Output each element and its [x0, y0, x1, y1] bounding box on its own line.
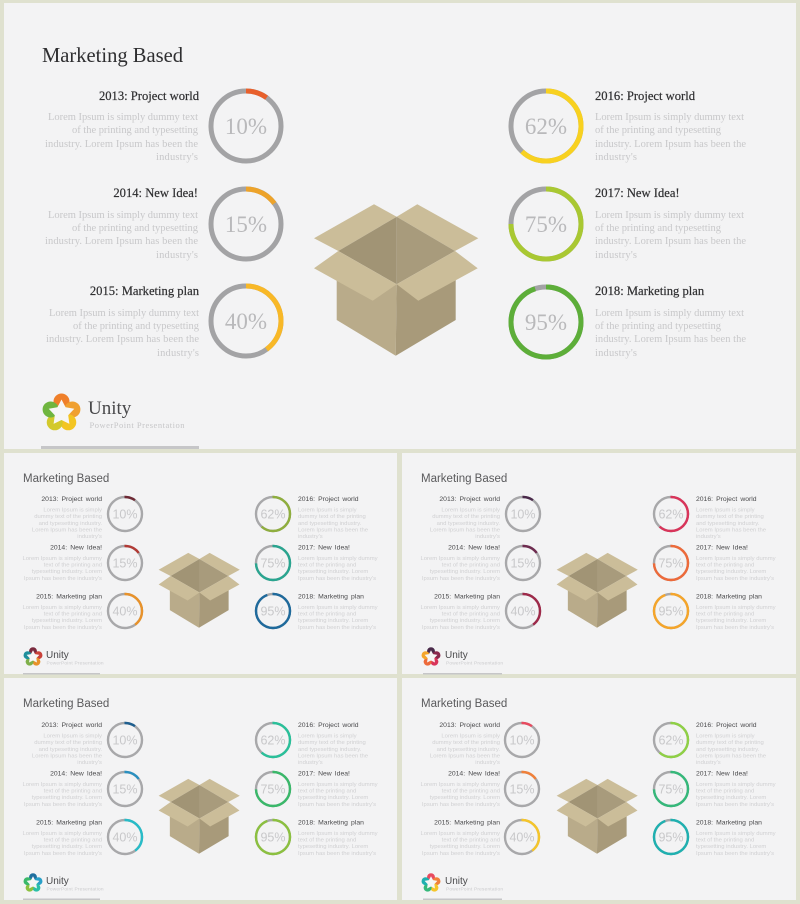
logo: [422, 873, 503, 900]
item: 2015 Marketing plan: 40%: [225, 309, 267, 334]
item: 2018: [256, 594, 378, 631]
illustration: box: [557, 553, 638, 628]
item: 2017: Lorem Ipsum is simply dummy: [298, 782, 378, 788]
item: 2016: 2016: Project world: [696, 722, 757, 729]
item: 2018: [256, 820, 378, 857]
item: 2014: Ipsum has been the industry's: [24, 802, 102, 808]
item: 2013: 10%: [509, 734, 535, 748]
item: 2018: 95%: [658, 604, 684, 618]
panel: variant 2: [402, 453, 796, 674]
item: 2018 Marketing plan: Lorem Ipsum is simply dummy text: [595, 308, 744, 319]
item: 2015: text of the printing and: [442, 838, 500, 844]
item: 2018: 2018: Marketing plan: [298, 820, 364, 826]
item: 2014: Ipsum has been the industry's: [422, 576, 500, 582]
item: 2015: 40%: [112, 604, 138, 618]
item: 2014: Ipsum has been the industry's: [24, 576, 102, 582]
item: 2016: 2016: Project world: [298, 496, 359, 503]
item: 2014: 2014: New Idea!: [50, 770, 102, 778]
item: 2018: [654, 820, 776, 857]
item: 2015: 40%: [112, 830, 138, 844]
item: 2017: 2017: New Idea!: [298, 770, 350, 778]
item: 2017: Ipsum has been the industry's: [298, 802, 376, 808]
item: 2018: typesetting industry. Lorem: [696, 844, 766, 850]
item: 2015: Ipsum has been the industry's: [24, 625, 102, 631]
item: 2017: Ipsum has been the industry's: [696, 576, 774, 582]
item: 2013: dummy text of the printing: [432, 740, 500, 746]
item: 2013: [430, 496, 540, 540]
item: 2018: Ipsum has been the industry's: [696, 851, 774, 857]
item: 2014: text of the printing and: [44, 562, 102, 568]
item: 2017 New Idea: of the printing and typesetting: [595, 223, 722, 234]
item: 2016: and typesetting industry.: [298, 521, 362, 527]
item: 2014 New Idea: [45, 186, 281, 261]
item: 2015: [420, 820, 539, 857]
item: 2013 Project world: of the printing and typesetting: [72, 125, 199, 136]
item: 2018: Ipsum has been the industry's: [696, 625, 774, 631]
item: 2017: typesetting industry. Lorem: [298, 795, 368, 801]
item: 2016: and typesetting industry.: [696, 747, 760, 753]
item: 2017: [654, 770, 776, 808]
item: 2013: 10%: [112, 734, 138, 748]
item: 2018 Marketing plan: industry. Lorem Ipsum has been the: [595, 334, 746, 345]
item: 2013: and typesetting industry.: [437, 521, 500, 527]
item: 2015: Lorem Ipsum is simply dummy: [420, 605, 500, 611]
logo: Unity: [445, 876, 468, 887]
illustration: box: [159, 779, 240, 854]
item: 2014: Lorem Ipsum is simply dummy: [22, 556, 102, 562]
item: 2016: 2016: Project world: [298, 722, 359, 729]
logo: PowerPoint Presentation: [46, 886, 104, 892]
item: 2018 Marketing plan: 2018: Marketing plan: [595, 284, 705, 298]
item: 2018: typesetting industry. Lorem: [298, 844, 368, 850]
item: 2014 New Idea: 2014: New Idea!: [113, 186, 198, 200]
item: 2014: 2014: New Idea!: [50, 544, 102, 552]
item: 2018: Lorem Ipsum is simply dummy: [298, 831, 378, 837]
item: 2016: Lorem Ipsum has been the: [298, 754, 369, 760]
item: 2014: typesetting industry. Lorem: [32, 795, 102, 801]
item: 2015 Marketing plan: industry's: [157, 348, 199, 359]
item: 2018 Marketing plan: industry's: [595, 348, 637, 359]
item: 2014: 15%: [509, 782, 535, 796]
item: 2018: 95%: [260, 604, 286, 618]
item: 2014 New Idea: of the printing and typesetting: [72, 223, 199, 234]
item: 2017: text of the printing and: [696, 788, 754, 794]
logo: Unity: PowerPoint Presentation: [90, 420, 185, 430]
item: 2018: text of the printing and: [696, 838, 754, 844]
item: 2017: [654, 544, 776, 582]
item: 2016: industry's: [298, 534, 323, 540]
item: 2018 Marketing plan: 95%: [525, 310, 567, 335]
item: 2016: 62%: [658, 734, 684, 748]
item: 2016: dummy text of the printing: [298, 740, 366, 746]
item: 2014 New Idea: Lorem Ipsum is simply dummy text: [48, 210, 198, 221]
item: 2013 Project world: industry's: [156, 152, 198, 163]
item: 2018: typesetting industry. Lorem: [298, 618, 368, 624]
item: 2016: Lorem Ipsum has been the: [696, 754, 767, 760]
item: 2013: 2013: Project world: [41, 722, 102, 729]
logo: PowerPoint Presentation: [446, 660, 503, 666]
item: 2015: text of the printing and: [44, 612, 102, 618]
item: 2013 Project world: 2013: Project world: [99, 89, 200, 103]
heading: Marketing Based: [421, 473, 507, 485]
item: 2018: typesetting industry. Lorem: [696, 618, 766, 624]
item: 2014: 15%: [510, 556, 536, 570]
item: 2017: 75%: [260, 556, 286, 570]
illustration: box: [557, 779, 638, 854]
item: 2015: Ipsum has been the industry's: [422, 851, 500, 857]
item: 2015 Marketing plan: of the printing and typesetting: [73, 321, 200, 332]
item: 2018: 2018: Marketing plan: [298, 594, 364, 600]
item: 2017: 75%: [260, 782, 286, 796]
item: 2015: 2015: Marketing plan: [36, 820, 102, 826]
item: 2015: text of the printing and: [44, 838, 102, 844]
item: 2017: Lorem Ipsum is simply dummy: [298, 556, 378, 562]
item: 2016: Lorem Ipsum is simply: [696, 508, 755, 514]
item: 2016 Project world: 2016: Project world: [595, 89, 696, 103]
item: 2018: Ipsum has been the industry's: [298, 625, 376, 631]
item: 2016: 62%: [658, 508, 684, 522]
item: 2017 New Idea: industry's: [595, 250, 637, 261]
item: 2016: industry's: [298, 760, 323, 766]
logo: Unity: [41, 394, 199, 449]
heading: Marketing Based: [23, 698, 109, 710]
illustration: box: [159, 553, 240, 628]
item: 2016: Lorem Ipsum is simply: [298, 734, 357, 740]
item: 2015: 2015: Marketing plan: [434, 594, 500, 600]
item: 2017 New Idea: 75%: [525, 212, 567, 237]
item: 2017: [256, 770, 378, 808]
item: 2017: Lorem Ipsum is simply dummy: [696, 782, 776, 788]
item: 2017: Lorem Ipsum is simply dummy: [696, 556, 776, 562]
heading: Marketing Based: [23, 473, 109, 485]
panel: variant 1: [4, 453, 397, 674]
item: 2015: Ipsum has been the industry's: [24, 851, 102, 857]
item: 2018: Lorem Ipsum is simply dummy: [696, 831, 776, 837]
item: 2017: 2017: New Idea!: [298, 544, 350, 552]
item: 2016: dummy text of the printing: [298, 514, 366, 520]
item: 2013 Project world: 10%: [225, 114, 267, 139]
item: 2014: Ipsum has been the industry's: [422, 802, 500, 808]
item: 2013: industry's: [77, 534, 102, 540]
item: 2013: industry's: [77, 760, 102, 766]
item: 2016: and typesetting industry.: [298, 747, 362, 753]
item: 2016: 62%: [260, 734, 286, 748]
item: 2013: Lorem Ipsum has been the: [32, 528, 103, 534]
item: 2017: Ipsum has been the industry's: [696, 802, 774, 808]
item: 2016 Project world: of the printing and typesetting: [595, 125, 722, 136]
item: 2017: typesetting industry. Lorem: [696, 569, 766, 575]
item: 2016 Project world: 62%: [525, 114, 567, 139]
item: 2015: typesetting industry. Lorem: [430, 844, 500, 850]
item: 2016 Project world: [511, 89, 746, 163]
item: 2013: 2013: Project world: [41, 496, 102, 503]
item: 2016: [654, 496, 767, 540]
item: 2018: 95%: [260, 830, 286, 844]
item: 2013: industry's: [475, 760, 500, 766]
item: 2016: dummy text of the printing: [696, 514, 764, 520]
item: 2016: industry's: [696, 534, 721, 540]
item: 2016: [256, 496, 369, 540]
item: 2018: Lorem Ipsum is simply dummy: [298, 605, 378, 611]
item: 2014: 2014: New Idea!: [448, 770, 500, 778]
item: 2015: 40%: [509, 830, 535, 844]
item: 2014: typesetting industry. Lorem: [430, 795, 500, 801]
item: 2013: Lorem Ipsum has been the: [32, 754, 103, 760]
item: 2016 Project world: industry. Lorem Ipsum has been the: [595, 139, 746, 150]
item: 2014 New Idea: 15%: [225, 212, 267, 237]
heading: Marketing Based: [421, 698, 507, 710]
logo: PowerPoint Presentation: [446, 886, 503, 892]
item: 2014: Lorem Ipsum is simply dummy: [22, 782, 102, 788]
item: 2017: text of the printing and: [696, 562, 754, 568]
item: 2016: dummy text of the printing: [696, 740, 764, 746]
item: 2018: Lorem Ipsum is simply dummy: [696, 605, 776, 611]
item: 2013: Lorem Ipsum is simply: [441, 734, 500, 740]
item: 2017: 2017: New Idea!: [696, 770, 748, 778]
item: 2017: Ipsum has been the industry's: [298, 576, 376, 582]
logo: Unity: [46, 876, 69, 887]
item: 2014 New Idea: industry's: [156, 250, 198, 261]
logo: [23, 647, 104, 674]
item: 2017: text of the printing and: [298, 562, 356, 568]
item: 2016: 2016: Project world: [696, 496, 757, 503]
item: 2013 Project world: industry. Lorem Ipsum has been the: [45, 139, 198, 150]
item: 2015: 40%: [510, 604, 536, 618]
item: 2014: [420, 544, 540, 582]
item: 2018: Ipsum has been the industry's: [298, 851, 376, 857]
item: 2016: Lorem Ipsum is simply: [696, 734, 755, 740]
item: 2013 Project world: Lorem Ipsum is simply dummy text: [48, 112, 198, 123]
item: 2018: 95%: [658, 830, 684, 844]
item: 2013: and typesetting industry.: [39, 747, 102, 753]
item: 2013: dummy text of the printing: [432, 514, 500, 520]
item: 2014: text of the printing and: [442, 788, 500, 794]
item: 2013 Project world: [45, 89, 281, 163]
item: 2018: [654, 594, 776, 631]
item: 2013: dummy text of the printing: [34, 514, 102, 520]
item: 2014: [420, 770, 539, 808]
item: 2015: [22, 820, 142, 857]
item: 2015: [420, 594, 540, 631]
item: 2018: text of the printing and: [696, 612, 754, 618]
item: 2014: Lorem Ipsum is simply dummy: [420, 782, 500, 788]
item: 2013: 10%: [112, 508, 138, 522]
item: 2017 New Idea: industry. Lorem Ipsum has been the: [595, 236, 746, 247]
item: 2013: industry's: [475, 534, 500, 540]
illustration: open cardboard box: [314, 204, 478, 356]
item: 2013: and typesetting industry.: [39, 521, 102, 527]
item: 2015: Lorem Ipsum is simply dummy: [22, 605, 102, 611]
item: 2013: [32, 496, 142, 540]
item: 2016 Project world: industry's: [595, 152, 637, 163]
item: 2013: [430, 722, 539, 766]
panel: main slide: [4, 3, 796, 449]
item: 2014: Lorem Ipsum is simply dummy: [420, 556, 500, 562]
item: 2018 Marketing plan: of the printing and typesetting: [595, 321, 722, 332]
item: 2015: text of the printing and: [442, 612, 500, 618]
item: 2017: typesetting industry. Lorem: [298, 569, 368, 575]
item: 2014: 2014: New Idea!: [448, 544, 500, 552]
item: 2015: Ipsum has been the industry's: [422, 625, 500, 631]
item: 2013: 10%: [510, 508, 536, 522]
item: 2016 Project world: Lorem Ipsum is simply dummy text: [595, 112, 744, 123]
item: 2018: 2018: Marketing plan: [696, 594, 762, 600]
item: 2015 Marketing plan: industry. Lorem Ipsum has been the: [46, 334, 199, 345]
item: 2015 Marketing plan: [46, 284, 281, 359]
title: Marketing Based: [42, 43, 183, 67]
item: 2015: 2015: Marketing plan: [434, 820, 500, 826]
item: 2014: text of the printing and: [442, 562, 500, 568]
item: 2017: text of the printing and: [298, 788, 356, 794]
item: 2013: dummy text of the printing: [34, 740, 102, 746]
item: 2015: Lorem Ipsum is simply dummy: [420, 831, 500, 837]
item: 2013: and typesetting industry.: [437, 747, 500, 753]
item: 2018 Marketing plan: [511, 284, 746, 359]
logo: Unity: Unity: [88, 398, 132, 419]
item: 2013: Lorem Ipsum has been the: [430, 528, 501, 534]
item: 2016: Lorem Ipsum has been the: [696, 528, 767, 534]
item: 2017 New Idea: Lorem Ipsum is simply dummy text: [595, 210, 744, 221]
item: 2013: Lorem Ipsum is simply: [441, 508, 500, 514]
item: 2018: text of the printing and: [298, 838, 356, 844]
item: 2016: Lorem Ipsum has been the: [298, 528, 369, 534]
item: 2016: [654, 722, 767, 766]
item: 2013: Lorem Ipsum is simply: [43, 508, 102, 514]
item: 2014: 15%: [112, 782, 138, 796]
item: 2018: 2018: Marketing plan: [696, 820, 762, 826]
item: 2016: industry's: [696, 760, 721, 766]
item: 2014 New Idea: industry. Lorem Ipsum has been the: [45, 236, 198, 247]
item: 2013: 2013: Project world: [439, 496, 500, 503]
item: 2017: 75%: [658, 782, 684, 796]
item: 2013: Lorem Ipsum has been the: [430, 754, 501, 760]
logo: Unity: [445, 650, 468, 661]
item: 2013: [32, 722, 142, 766]
item: 2015: 2015: Marketing plan: [36, 594, 102, 600]
item: 2014: [22, 770, 142, 808]
item: 2016: 62%: [260, 508, 286, 522]
panel: variant 4: [402, 678, 796, 900]
logo: PowerPoint Presentation: [46, 660, 104, 666]
item: 2017 New Idea: [511, 186, 746, 261]
item: 2016: and typesetting industry.: [696, 521, 760, 527]
item: 2015: typesetting industry. Lorem: [32, 844, 102, 850]
item: 2017: [256, 544, 378, 582]
item: 2015: Lorem Ipsum is simply dummy: [22, 831, 102, 837]
item: 2017: typesetting industry. Lorem: [696, 795, 766, 801]
item: 2013: 2013: Project world: [439, 722, 500, 729]
item: 2015 Marketing plan: Lorem Ipsum is simply dummy text: [49, 308, 199, 319]
logo: Unity: [46, 650, 69, 661]
item: 2014: 15%: [112, 556, 138, 570]
item: 2015 Marketing plan: 2015: Marketing plan: [90, 284, 200, 298]
item: 2015: typesetting industry. Lorem: [430, 618, 500, 624]
item: 2014: [22, 544, 142, 582]
item: 2017: 75%: [658, 556, 684, 570]
panel: variant 3: [4, 678, 397, 900]
item: 2015: typesetting industry. Lorem: [32, 618, 102, 624]
item: 2015: [22, 594, 142, 631]
logo: [422, 647, 503, 674]
item: 2016: Lorem Ipsum is simply: [298, 508, 357, 514]
item: 2014: typesetting industry. Lorem: [32, 569, 102, 575]
item: 2017: 2017: New Idea!: [696, 544, 748, 552]
item: 2013: Lorem Ipsum is simply: [43, 734, 102, 740]
item: 2014: typesetting industry. Lorem: [430, 569, 500, 575]
item: 2017 New Idea: 2017: New Idea!: [595, 186, 680, 200]
logo: [23, 873, 104, 900]
item: 2016: [256, 722, 369, 766]
item: 2014: text of the printing and: [44, 788, 102, 794]
item: 2018: text of the printing and: [298, 612, 356, 618]
